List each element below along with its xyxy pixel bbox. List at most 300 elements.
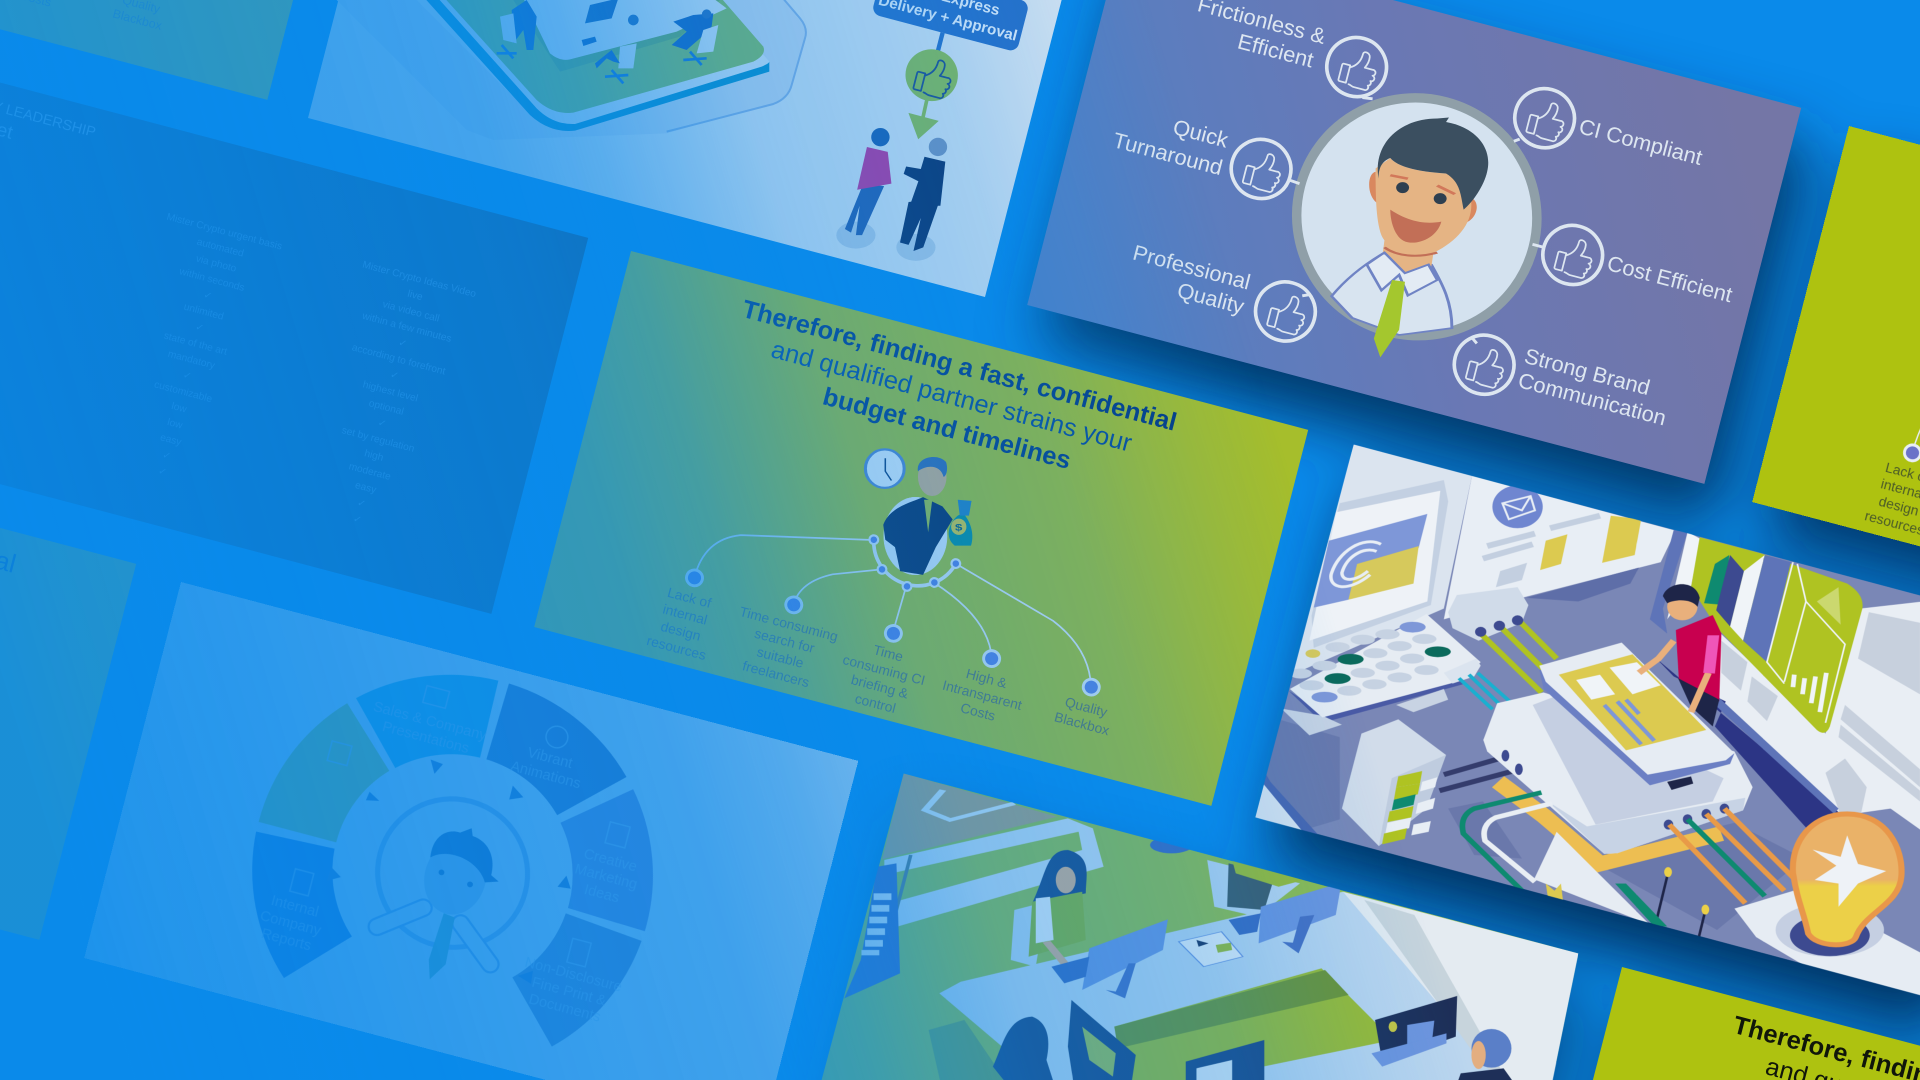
- teal bar: [1704, 555, 1729, 605]
- wall pipes: [925, 790, 1014, 820]
- screen cards: [1576, 675, 1615, 700]
- slide background: [0, 59, 588, 614]
- label: internal company reports: Company: [258, 908, 323, 939]
- slide background: [84, 582, 858, 1080]
- monitor 1: [1082, 919, 1168, 990]
- left monitor inner: [1309, 491, 1440, 641]
- money bag: [949, 513, 972, 546]
- isometric office platform: [333, 0, 806, 140]
- person legs: [1678, 678, 1719, 726]
- left monitor frame: [1312, 480, 1448, 648]
- benefit labels: [1078, 0, 1771, 439]
- label: time consuming search: suitable: [755, 644, 805, 671]
- table column 1: low: [166, 417, 184, 432]
- badge ring: [1448, 329, 1520, 401]
- worker middle: [595, 50, 620, 68]
- blue bar: [1743, 555, 1791, 662]
- green keys: [1325, 646, 1451, 684]
- platform outer slab: [333, 0, 806, 140]
- wedge: vibrant animations: [477, 683, 642, 830]
- floor tile shades: [1262, 716, 1804, 930]
- grey box: [1496, 563, 1527, 587]
- slide background: [534, 251, 1308, 806]
- lower left corner: [1255, 784, 1302, 830]
- blue keys: [1312, 622, 1426, 702]
- dark monitor dot: [1389, 1021, 1397, 1032]
- node arc: [865, 540, 956, 595]
- badge: cost efficient: [1536, 219, 1609, 291]
- table column 2: optional: [368, 398, 405, 418]
- bulb base: [1734, 889, 1920, 1073]
- C logo: [1331, 542, 1381, 587]
- socket dark ring: [1790, 915, 1870, 956]
- people shaking hands: [836, 128, 947, 261]
- tablet stand: [1667, 776, 1693, 790]
- man 1 legs: [845, 184, 884, 235]
- table column 1: low: [170, 401, 188, 416]
- worker dark head: [702, 9, 711, 19]
- left eye: [1396, 182, 1409, 193]
- lawn: [443, 0, 764, 113]
- thumb icon: [1465, 345, 1508, 389]
- thumb icon: [1266, 292, 1309, 336]
- wedge: green: [259, 689, 403, 851]
- dark monitor left: [1068, 1000, 1136, 1080]
- label: strong brand communication: Communication: [1516, 368, 1669, 430]
- rack side: [1379, 755, 1446, 846]
- label: non disclosure: Documents: [527, 992, 602, 1026]
- chart bars: [1793, 673, 1826, 712]
- person 1 body: [1029, 892, 1086, 957]
- tie: [924, 500, 932, 532]
- badge: CI compliant: [1508, 82, 1581, 154]
- suit: [883, 497, 953, 575]
- table column 2: ✓: [377, 418, 388, 430]
- pole: [893, 855, 911, 923]
- desk: [939, 892, 1579, 1080]
- label: cost efficient: Cost Efficient: [1605, 250, 1735, 307]
- yellow blocks: [1540, 534, 1567, 570]
- table column 2: Mister Crypto Ideas Video: [361, 260, 478, 300]
- chart triangle: [1817, 587, 1841, 625]
- label: lack of internal design resources: resources: [645, 633, 708, 663]
- thumb icon: [1526, 98, 1568, 143]
- keyboard 2: [1229, 913, 1261, 935]
- table column 2: live: [406, 289, 424, 303]
- shadow band: [1364, 900, 1514, 1080]
- chairs: [500, 13, 718, 68]
- table column 1: ✓: [194, 322, 205, 335]
- white band: [1667, 532, 1701, 619]
- label: creative marketing ideas: Creative: [582, 846, 638, 875]
- floor shadow: [929, 1020, 1014, 1080]
- card play: [1196, 940, 1209, 947]
- floor tile shade: [1526, 567, 1639, 601]
- left dark column: [1650, 530, 1688, 634]
- tablet screen: [1559, 654, 1706, 750]
- keys: [1289, 629, 1439, 696]
- wedge: sales and company presentations: [342, 647, 500, 788]
- tie: [424, 912, 458, 982]
- label: sales presentations: Sales & Company: [371, 699, 489, 744]
- wedge: non-disclosure: [498, 904, 643, 1062]
- panel: purple benefits slide: [1027, 0, 1801, 484]
- right wall: [1713, 594, 1920, 876]
- white slot: [1730, 555, 1765, 641]
- worker head: [628, 15, 639, 25]
- lime cables: [1481, 619, 1557, 692]
- slide background: [1752, 126, 1920, 681]
- man 2 legs: [900, 198, 940, 251]
- panel: wheel of services slide: [84, 582, 858, 1080]
- panel: express delivery slide: [308, 0, 1082, 297]
- table column 1: unlimited: [183, 302, 225, 323]
- monitor: [585, 0, 618, 23]
- tablet edge: [1539, 669, 1734, 785]
- envelope: [1502, 496, 1535, 519]
- person hair: [1663, 584, 1700, 607]
- circle backdrop: [884, 497, 947, 575]
- light stripe: [884, 818, 1104, 930]
- panel: top-left slide, quality labels: [0, 0, 364, 100]
- trench edge: [1715, 698, 1839, 814]
- yellow key: [1305, 649, 1320, 658]
- title: and qualified partner strains your: [768, 336, 1135, 458]
- label: internal company reports: Internal: [269, 893, 320, 921]
- table column 1: automated: [195, 237, 245, 260]
- hair: [427, 820, 510, 886]
- port heads upper: [1475, 615, 1729, 830]
- monitor 2 stand: [1282, 915, 1314, 953]
- endpoint dot: [1903, 443, 1920, 463]
- platform teal edge: [423, 0, 769, 131]
- right white zone: [1343, 892, 1579, 1080]
- lamp tips: [1664, 867, 1709, 915]
- label: creative marketing ideas: Ideas: [582, 882, 621, 906]
- keyboard port: [1444, 659, 1481, 684]
- problem labels: [644, 583, 1116, 770]
- centre ring: [361, 782, 544, 964]
- ceiling lamp: [1150, 837, 1193, 853]
- slide background: [1027, 0, 1801, 484]
- panel: factory illustration slide: [1255, 444, 1920, 996]
- badge ring: [1536, 219, 1609, 291]
- neck: [1383, 241, 1434, 275]
- doc bars: [1483, 516, 1600, 559]
- rack slots: [1382, 771, 1437, 844]
- envelope badge: [1492, 485, 1543, 528]
- table column 1: ✓: [161, 450, 172, 463]
- wedge: internal company reports: [223, 828, 372, 992]
- speech bubble: [844, 0, 1030, 158]
- machine side: [1548, 798, 1745, 854]
- arm fills: [375, 898, 500, 964]
- wall clock: [865, 449, 904, 488]
- navy bar: [1716, 555, 1744, 626]
- worried man: [368, 811, 522, 993]
- dark monitor right: [1375, 996, 1457, 1062]
- man 1 head: [871, 128, 890, 146]
- light bulb: [1793, 814, 1902, 945]
- second person backside: [1207, 860, 1300, 917]
- badge ring: [1249, 275, 1322, 348]
- label: lack of internal design resources: design: [659, 619, 702, 644]
- man 1 shirt: [857, 147, 891, 190]
- label: lack of internal design resources: Lack of: [666, 585, 713, 611]
- panel: left slide: [0, 385, 136, 940]
- right eye: [1434, 193, 1447, 204]
- block star: [1546, 884, 1563, 901]
- dark cables: [1440, 757, 1520, 791]
- problem slide nodes and labels: [644, 486, 1141, 770]
- card lime: [1216, 943, 1232, 953]
- table column 1: ✓: [202, 290, 213, 303]
- machine recess: [1533, 697, 1724, 825]
- triangle block: [1534, 832, 1650, 925]
- label: vibrant animations: Animations: [509, 758, 582, 792]
- second person shirt: [1232, 860, 1304, 887]
- chair bases: [497, 45, 707, 83]
- thumb icon: [1338, 47, 1380, 92]
- label: time consuming CI briefing: control: [853, 691, 897, 716]
- person 3 face: [1471, 1041, 1486, 1069]
- lime screen: [1691, 537, 1863, 733]
- spokes: [1262, 83, 1569, 354]
- table column 1: customizable: [153, 379, 214, 405]
- table column 1: mandatory: [167, 349, 217, 372]
- navy trench: [1656, 659, 1843, 830]
- person seated left: chair: [1011, 902, 1046, 967]
- keyboard 1: [1051, 957, 1089, 983]
- platform outline: [667, 0, 806, 132]
- arm outlines: [375, 898, 500, 964]
- wall grey modules: [1721, 612, 1920, 817]
- thumb icon: [1554, 235, 1596, 280]
- monitor wall: [1294, 444, 1472, 670]
- person face: [1667, 593, 1698, 620]
- label: creative marketing ideas: Marketing: [573, 862, 639, 893]
- connector box: [1448, 587, 1528, 641]
- label: time consuming search: Time consuming: [738, 604, 840, 644]
- keyboard feet: [1281, 709, 1342, 735]
- label: professional quality: Quality: [1175, 277, 1247, 319]
- label: lack of internal design resources: internal: [661, 602, 709, 628]
- desk card: [1179, 932, 1243, 967]
- desk green shade: [1114, 970, 1349, 1048]
- eyes: [437, 869, 475, 888]
- table column 1: ✓: [157, 466, 168, 479]
- server rack: [1342, 719, 1446, 846]
- label: time consuming search: search for: [753, 626, 817, 656]
- table column 1: within seconds: [177, 266, 246, 294]
- wedge icons: [290, 665, 651, 971]
- table column 2: ✓: [389, 370, 400, 382]
- lower left band: [1264, 776, 1318, 834]
- keyboard plate: [1290, 614, 1481, 717]
- shirt: [1332, 253, 1452, 335]
- person torso: [1676, 615, 1721, 701]
- label: quick turnaround: Quick: [1171, 114, 1231, 153]
- dark monitor left screen: [1082, 1027, 1116, 1077]
- portrait ring: [1271, 71, 1563, 362]
- person 3 body: [1454, 1068, 1521, 1080]
- table column 2: easy: [354, 480, 378, 496]
- slide background: [0, 385, 136, 940]
- desk green inset: [1114, 968, 1393, 1080]
- ring arrows: [315, 742, 593, 988]
- collar: [1367, 253, 1437, 295]
- panel: office illustration slide: [818, 773, 1579, 1080]
- screen bars: [1604, 700, 1654, 744]
- green floor strip: [1615, 884, 1667, 926]
- monitor 2: [1259, 883, 1341, 943]
- face: [416, 833, 494, 922]
- thumbs up circle: [900, 43, 964, 107]
- table: [523, 0, 727, 60]
- floor shadows: [836, 222, 876, 249]
- connector: [937, 33, 943, 54]
- label: professional quality: Professional: [1130, 240, 1253, 295]
- lamp posts: [1657, 876, 1705, 937]
- white tube: [1484, 803, 1552, 882]
- bubble box: [871, 0, 1030, 52]
- label: strong brand communication: Strong Brand: [1522, 343, 1653, 400]
- person 3 hair: [1471, 1029, 1511, 1068]
- orange floor track: [1498, 782, 1721, 864]
- arrow head: [903, 113, 939, 143]
- orange and green cables: [1669, 809, 1797, 903]
- badge ring: [1508, 82, 1581, 154]
- label: non disclosure: Fine Print &: [530, 975, 608, 1009]
- table column 2: set by regulation: [340, 425, 415, 455]
- badge ring: [1320, 31, 1393, 103]
- table column 2: ✓: [397, 338, 408, 350]
- person 2: [993, 1017, 1057, 1080]
- table column 1: ✓: [182, 370, 193, 383]
- panel drop shadows: [815, 0, 1920, 1080]
- mouth: [1390, 210, 1441, 243]
- bulb star: [1812, 835, 1886, 907]
- table column 2: via video call: [381, 299, 440, 325]
- monitor base: [1371, 1033, 1446, 1067]
- table column 2: highest level: [362, 379, 419, 405]
- hair: [918, 457, 947, 477]
- middle screen: [1196, 1060, 1232, 1080]
- label: high costs: Costs: [959, 700, 997, 724]
- arc nodes: [859, 534, 962, 602]
- slide background: [308, 0, 1082, 297]
- tablet body: [1539, 642, 1734, 775]
- label: quality blackbox: Blackbox: [111, 7, 164, 33]
- badge: strong brand: [1448, 329, 1520, 401]
- monitor wall right: [1444, 476, 1676, 619]
- second person legs: [1227, 863, 1275, 910]
- person 1 arm: [1046, 942, 1070, 970]
- man 2 jacket: [904, 157, 945, 206]
- stressed businessman with clock and money bag: [865, 449, 972, 575]
- thumb icon: [1242, 149, 1285, 194]
- green tube: [1462, 792, 1541, 891]
- table column 1: state of the art: [163, 331, 228, 358]
- connector line: [1915, 369, 1920, 456]
- yellow screen: [1348, 546, 1419, 600]
- label: frictionless and efficient: Efficient: [1235, 29, 1316, 73]
- table column 2: moderate: [347, 461, 392, 483]
- platform light top: [413, 0, 769, 129]
- slide background: [1525, 967, 1920, 1080]
- table column 1: Mister Crypto urgent basis: [165, 212, 283, 253]
- title: Therefore, finding a fast, confidential: [739, 295, 1179, 437]
- badge: frictionless: [1320, 31, 1393, 103]
- eyebrows: [1390, 175, 1455, 194]
- wedge: creative marketing ideas: [540, 773, 678, 931]
- kiosk: [844, 863, 900, 998]
- clock hands: [885, 458, 891, 480]
- label: CI compliant: CI Compliant: [1577, 114, 1705, 170]
- label: quality blackbox: Quality: [1063, 694, 1109, 720]
- label: lack of internal design resources: design: [1877, 494, 1920, 519]
- label: time consuming search: freelancers: [741, 658, 811, 690]
- worker left: [512, 0, 713, 50]
- label: time consuming CI briefing: briefing &: [849, 672, 910, 702]
- table column 2: according to forefront: [351, 342, 447, 378]
- slide floor: [1281, 444, 1920, 963]
- person 1 face: [1056, 867, 1076, 893]
- man 2 head: [929, 138, 947, 156]
- ears: [1369, 172, 1477, 223]
- smiling man portrait: [1332, 118, 1488, 357]
- slide background: [0, 0, 364, 100]
- table column 2: high: [363, 448, 384, 464]
- cyan cables: [1459, 673, 1510, 709]
- table column 2: ✓: [356, 498, 367, 510]
- label: high costs: Intransparent: [941, 678, 1024, 713]
- table column 2: within a few minutes: [360, 311, 453, 345]
- panel: technology leadership comparison table: [0, 59, 588, 614]
- person sleeve: [1703, 635, 1719, 674]
- label: vibrant animations: Vibrant: [526, 745, 574, 772]
- panel: lime slide lower right: [1525, 967, 1920, 1080]
- label: time consuming CI briefing: Time: [872, 642, 905, 665]
- label: sales presentations: Presentations: [380, 719, 471, 757]
- keyboard base edge: [1289, 681, 1463, 720]
- panel: problem slide with fast confidential partner: [534, 251, 1308, 806]
- face: [1376, 158, 1471, 255]
- endpoint dots: [684, 568, 1102, 697]
- person arm: [1639, 641, 1708, 712]
- connector lines: [694, 535, 1091, 687]
- tan wall: [882, 773, 1057, 859]
- badge ring: [1225, 133, 1297, 205]
- label: quality blackbox: Blackbox: [1053, 709, 1111, 738]
- bag top: [958, 500, 972, 516]
- table column 1: easy: [159, 432, 183, 449]
- blue screen: [1314, 514, 1427, 607]
- tie: [1374, 280, 1405, 357]
- kiosk buttons: [861, 893, 891, 955]
- arrow line: [922, 100, 928, 120]
- label: internal company reports: Reports: [259, 926, 313, 955]
- head: [918, 458, 947, 496]
- badge: professional: [1249, 275, 1322, 348]
- chart lines: [1767, 562, 1845, 723]
- person 1 hair: [1032, 850, 1087, 903]
- hair: [1378, 118, 1488, 210]
- monitor 1 stand: [1106, 963, 1136, 998]
- badge: quick: [1225, 133, 1297, 205]
- table column 1: via photo: [195, 254, 238, 275]
- dollar coin: [951, 519, 966, 535]
